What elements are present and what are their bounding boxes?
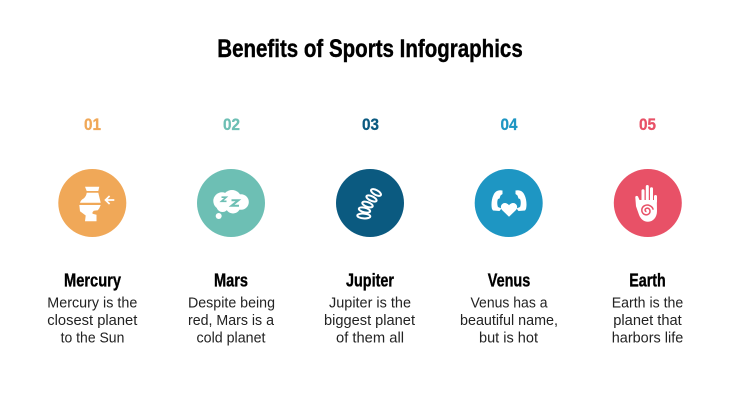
number 02: 02 bbox=[223, 115, 240, 134]
column: Venus bbox=[460, 115, 558, 346]
description: closest planet bbox=[47, 312, 138, 329]
column: Earth bbox=[612, 115, 683, 346]
description bbox=[188, 294, 275, 346]
heading: Venus bbox=[488, 270, 530, 290]
description: Mercury is the bbox=[47, 294, 137, 312]
description bbox=[47, 294, 138, 346]
description: Despite being bbox=[188, 294, 275, 312]
heading: Mars bbox=[214, 270, 248, 290]
column: Mars bbox=[188, 115, 275, 346]
description: cold planet bbox=[196, 330, 266, 346]
description: to the Sun bbox=[61, 330, 124, 346]
icon: sleep thought bubble bbox=[197, 169, 265, 237]
description bbox=[324, 294, 416, 346]
description bbox=[612, 294, 683, 346]
column: Jupiter bbox=[324, 115, 416, 346]
number 03: 03 bbox=[362, 115, 379, 134]
heading: Earth bbox=[629, 270, 666, 290]
description: beautiful name, bbox=[460, 312, 558, 329]
description: red, Mars is a bbox=[188, 312, 275, 329]
description: Earth is the bbox=[612, 294, 683, 312]
description: Venus has a bbox=[470, 294, 548, 312]
description bbox=[460, 294, 558, 346]
number 05: 05 bbox=[639, 115, 656, 134]
description: of them all bbox=[336, 330, 404, 346]
icon: arms holding heart bbox=[475, 169, 543, 237]
icon: spine bbox=[336, 169, 404, 237]
column: Mercury bbox=[47, 115, 138, 346]
heading: Jupiter bbox=[346, 270, 394, 290]
description: harbors life bbox=[612, 330, 683, 346]
title: Benefits of Sports Infographics bbox=[217, 35, 523, 63]
description: biggest planet bbox=[324, 312, 416, 329]
description: planet that bbox=[613, 312, 683, 329]
number 01: 01 bbox=[84, 115, 101, 134]
description: but is hot bbox=[479, 330, 539, 346]
heading: Mercury bbox=[64, 270, 121, 290]
description: Jupiter is the bbox=[329, 294, 411, 312]
number 04: 04 bbox=[500, 115, 518, 134]
icon: hand with spiral bbox=[614, 169, 682, 237]
icon: torso with arrow bbox=[58, 169, 126, 237]
